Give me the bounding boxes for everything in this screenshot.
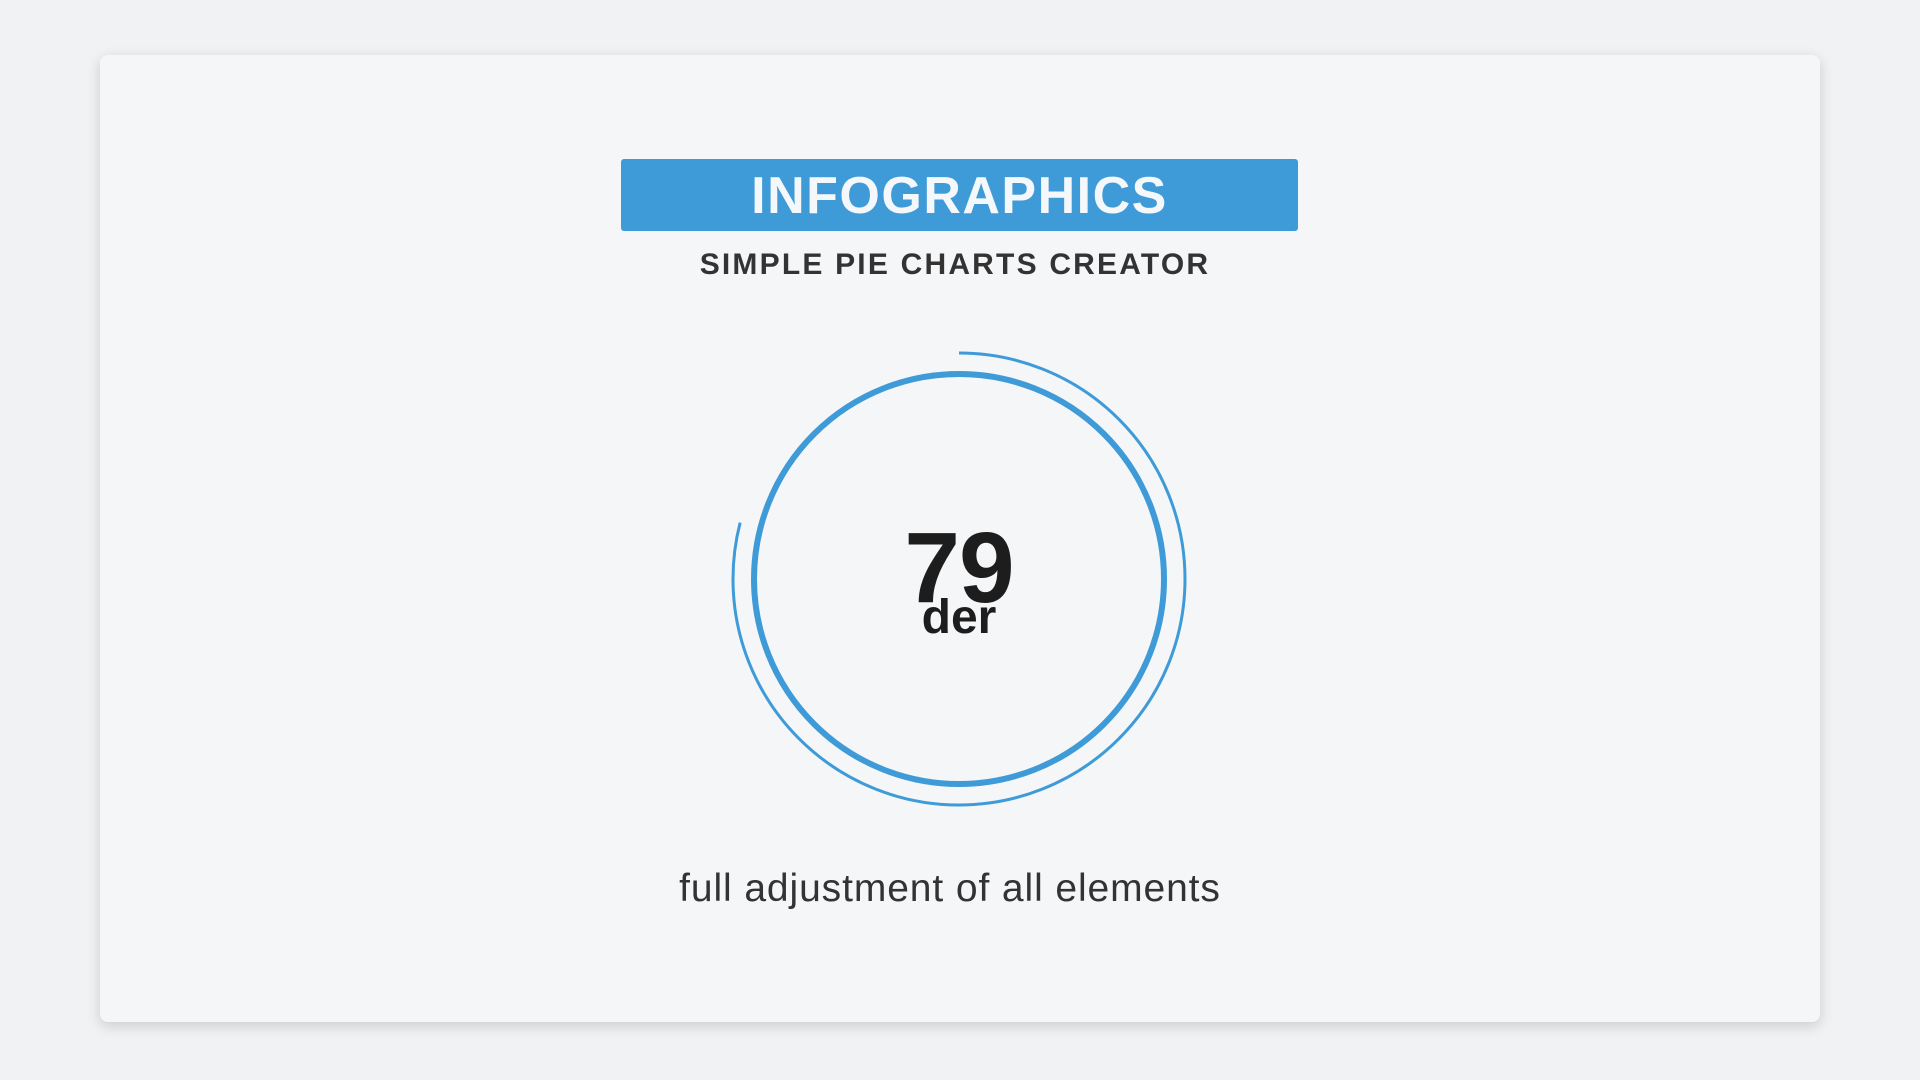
title	[621, 159, 1298, 231]
value label: der	[922, 591, 996, 644]
outer progress arc 79%	[733, 353, 1185, 805]
value label: 79	[904, 512, 1014, 624]
subtitle: SIMPLE PIE CHARTS CREATOR	[700, 248, 1210, 281]
inner ring	[754, 374, 1164, 784]
title: INFOGRAPHICS	[751, 167, 1168, 225]
caption: full adjustment of all elements	[679, 867, 1221, 910]
